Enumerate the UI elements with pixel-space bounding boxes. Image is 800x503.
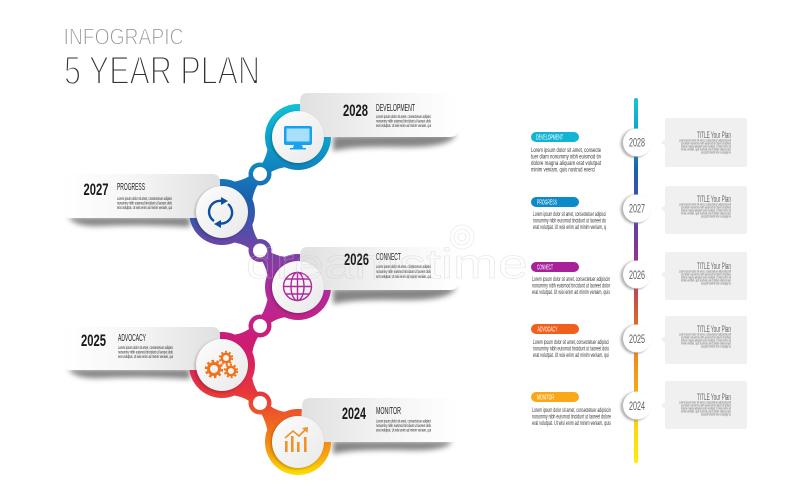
callout box 2027: TITLE Your Plan [697,194,731,205]
left column: advocacy [531,324,609,359]
text: 2027 progress: nonummy nibh euismod tincidunt ut laoreet dolo [117,200,172,206]
callout box 2028: Lorem ipsum dolor sit amet, consectetuer adipiscing elit [679,138,731,142]
text: 2028 development: Lorem ipsum dolor sit amet, consectetuer adipisci [376,114,431,119]
left column: development: DEVELOPMENT [536,134,563,142]
left column: development: tuer diam nonummy nibh euismod tin [531,154,601,160]
icon: growth chart [285,427,308,452]
callout box 2026: suscipit lobortis nisl ut aliquip ex [701,282,731,286]
left column: development [531,132,601,174]
left column: advocacy: Lorem ipsum dolor sit amet, consectetuer adipisci [533,339,609,346]
left column: progress: nonummy nibh euismod tincidunt ut laoreet do [533,218,606,224]
callout box 2028: dolore magna aliquam erat volutpat. Ut wisi enim ad [681,144,731,148]
left column: advocacy: erat volutpat. Ut wisi enim ad minim veniam, qui [533,352,609,359]
text: Lorem ipsum dolor sit amet, consectetuer adipisci [533,211,606,218]
callout box 2025: suscipit lobortis nisl ut aliquip ex [701,344,731,348]
left column: development: dolore magna aliquam erat volutpat [531,160,601,167]
left column: monitor: MONITOR [537,394,554,402]
left column: advocacy: nonummy nibh euismod tincidunt ut laoreet dolo [533,346,609,352]
left column: connect: erat volutpat. Ut wisi enim ad minim veniam, quis [532,289,610,296]
callout box 2024 [661,381,747,429]
connectors between milestone rings [234,149,285,430]
text: 2025 advocacy: Lorem ipsum dolor sit amet, consectetuer adipisci [118,345,173,350]
callout box 2026: dolore magna aliquam erat volutpat. Ut wisi enim ad [681,276,731,280]
callout box 2028 [661,118,747,167]
text: 2024 monitor: 2024 [342,404,366,423]
text: 2025 advocacy: erat volutpat. Ut wisi enim ad minim veniam, qui [118,354,173,359]
callout box 2026: Lorem ipsum dolor sit amet, consectetuer adipiscing elit [679,270,731,274]
timeline vertical line [634,98,638,463]
callout box 2026: minim veniam, quis nostrud exerci tation ullamcorper [681,278,731,282]
text: 2025 advocacy [81,331,173,359]
callout box 2027: dolore magna aliquam erat volutpat. Ut wisi enim ad [681,208,731,212]
callout box 2024: minim veniam, quis nostrud exerci tation ullamcorper [681,410,731,414]
callout box 2027: minim veniam, quis nostrud exerci tation ullamcorper [681,212,731,216]
left column: monitor [531,392,611,427]
text: 2024 monitor: MONITOR [376,406,401,417]
callout box 2026 [661,252,747,300]
callout box 2024: dolore magna aliquam erat volutpat. Ut wisi enim ad [681,406,731,410]
text: 2026 connect: CONNECT [376,252,401,263]
milestone 2025 advocacy [63,327,255,398]
left column: connect [531,262,610,296]
watermark [246,225,528,287]
text: 2026 connect: Lorem ipsum dolor sit amet, consectetuer adipisci [376,264,431,269]
left column: development: minim veniam, quis nostrud exerci [531,166,595,174]
title [64,24,260,93]
icon: monitor [284,126,312,150]
text: 2027 progress: PROGRESS [117,182,145,193]
icon: refresh arrows [209,197,232,228]
callout box 2024: Lorem ipsum dolor sit amet, consectetuer adipiscing elit [679,400,731,404]
text: 2026 connect: nonummy nibh euismod tincidunt ut laoreet dolo [376,269,431,274]
timeline nodes: 2024 [629,401,645,413]
callout box 2026: sed diam nonummy nibh euismod tincidunt ut laoreet [681,272,731,276]
callout box 2025: minim veniam, quis nostrud exerci tation ullamcorper [681,342,731,346]
text: 2024 monitor [342,404,431,432]
callout box 2026: TITLE Your Plan [697,261,731,272]
icon: gears [206,352,237,377]
callout box 2027: suscipit lobortis nisl ut aliquip ex [701,214,731,218]
text: 2025 advocacy: nonummy nibh euismod tincidunt ut laoreet dolo [118,350,173,354]
text: 2027 progress: Lorem ipsum dolor sit amet, consectetuer adipisci [117,196,172,201]
text: 2028 development [343,101,431,128]
milestone 2024 monitor [265,398,458,475]
callout box 2024: suscipit lobortis nisl ut aliquip ex [701,412,731,416]
text: 2028 development: 2028 [343,101,368,120]
milestone 2026 connect [265,247,458,320]
left column: progress: PROGRESS [537,200,557,206]
left column: connect: CONNECT [537,264,553,272]
timeline nodes: 2026 [629,270,645,282]
text: 2026 connect: erat volutpat. Ut wisi enim ad minim veniam, qui [376,274,431,279]
icon: globe [284,272,312,300]
callout box 2025: sed diam nonummy nibh euismod tincidunt ut laoreet [681,336,731,340]
callout box 2025: dolore magna aliquam erat volutpat. Ut wisi enim ad [681,338,731,342]
callout box 2025 [661,316,747,364]
text: 2025 advocacy: 2025 [81,331,106,350]
text: 2024 monitor: Lorem ipsum dolor sit amet, consectetuer adipisci [376,418,431,424]
left column: monitor: Lorem ipsum dolor sit amet, consectetuer adipiscin [532,407,611,414]
text: 2028 development: DEVELOPMENT [376,103,415,114]
timeline nodes: 2028 [629,138,645,150]
callout box 2028: minim veniam, quis nostrud exerci tation ullamcorper [681,148,731,152]
text: 2028 development: erat volutpat. Ut wisi enim ad minim veniam, qui [376,123,431,128]
text: 2024 monitor: nonummy nibh euismod tincidunt ut laoreet dolo [376,423,431,428]
callout box 2025: TITLE Your Plan [697,324,731,335]
watermark: dreamstime [246,240,528,287]
timeline nodes: 2025 [629,334,645,346]
left column: connect: nonummy nibh euismod tincidunt ut laoreet dolor [532,282,610,290]
text: 2027 progress [84,180,172,210]
timeline nodes: 2027 [629,204,645,216]
callout box 2024: TITLE Your Plan [697,392,731,403]
left column: development: Lorem ipsum dolor sit amet, consecte [531,147,601,154]
text: 2025 advocacy: ADVOCACY [118,333,146,344]
text: 2027 progress: erat volutpat. Ut wisi enim ad minim veniam, qui [117,205,172,210]
left column: progress: erat volutpat. Ut wisi enim ad minim veniam, q [533,224,606,231]
callout box 2028: TITLE Your Plan [697,130,731,141]
left column: monitor: erat volutpat. Ut wisi enim ad minim veniam, quis [532,420,611,427]
timeline nodes [620,128,651,421]
milestone 2027 progress [63,174,255,245]
left column: connect: Lorem ipsum dolor sit amet, consectetuer adipiscin [532,276,610,283]
callout box 2028: suscipit lobortis nisl ut aliquip ex [701,150,731,154]
title: 5 YEAR PLAN [64,49,260,93]
callout box 2024: sed diam nonummy nibh euismod tincidunt ut laoreet [681,404,731,408]
left column: advocacy: ADVOCACY [538,326,558,334]
text: 2026 connect [344,250,431,279]
title: INFOGRAPIC [64,24,184,50]
text: 2027 progress: 2027 [84,180,108,199]
callout box 2027: sed diam nonummy nibh euismod tincidunt ut laoreet [681,206,731,210]
callout box 2027: Lorem ipsum dolor sit amet, consectetuer adipiscing elit [679,202,731,206]
left column: progress [531,197,606,231]
callout box 2025: Lorem ipsum dolor sit amet, consectetuer adipiscing elit [679,332,731,336]
text: 2028 development: nonummy nibh euismod tincidunt ut laoreet dolo [376,118,431,124]
text: 2024 monitor: erat volutpat. Ut wisi enim ad minim veniam, qui [376,428,431,432]
callout box 2028: sed diam nonummy nibh euismod tincidunt ut laoreet [681,142,731,146]
left column: monitor: nonummy nibh euismod tincidunt ut laoreet dolore [532,414,611,420]
callout box 2027 [661,186,747,234]
milestone 2028 development [265,93,458,170]
text: 2026 connect: 2026 [344,250,369,269]
